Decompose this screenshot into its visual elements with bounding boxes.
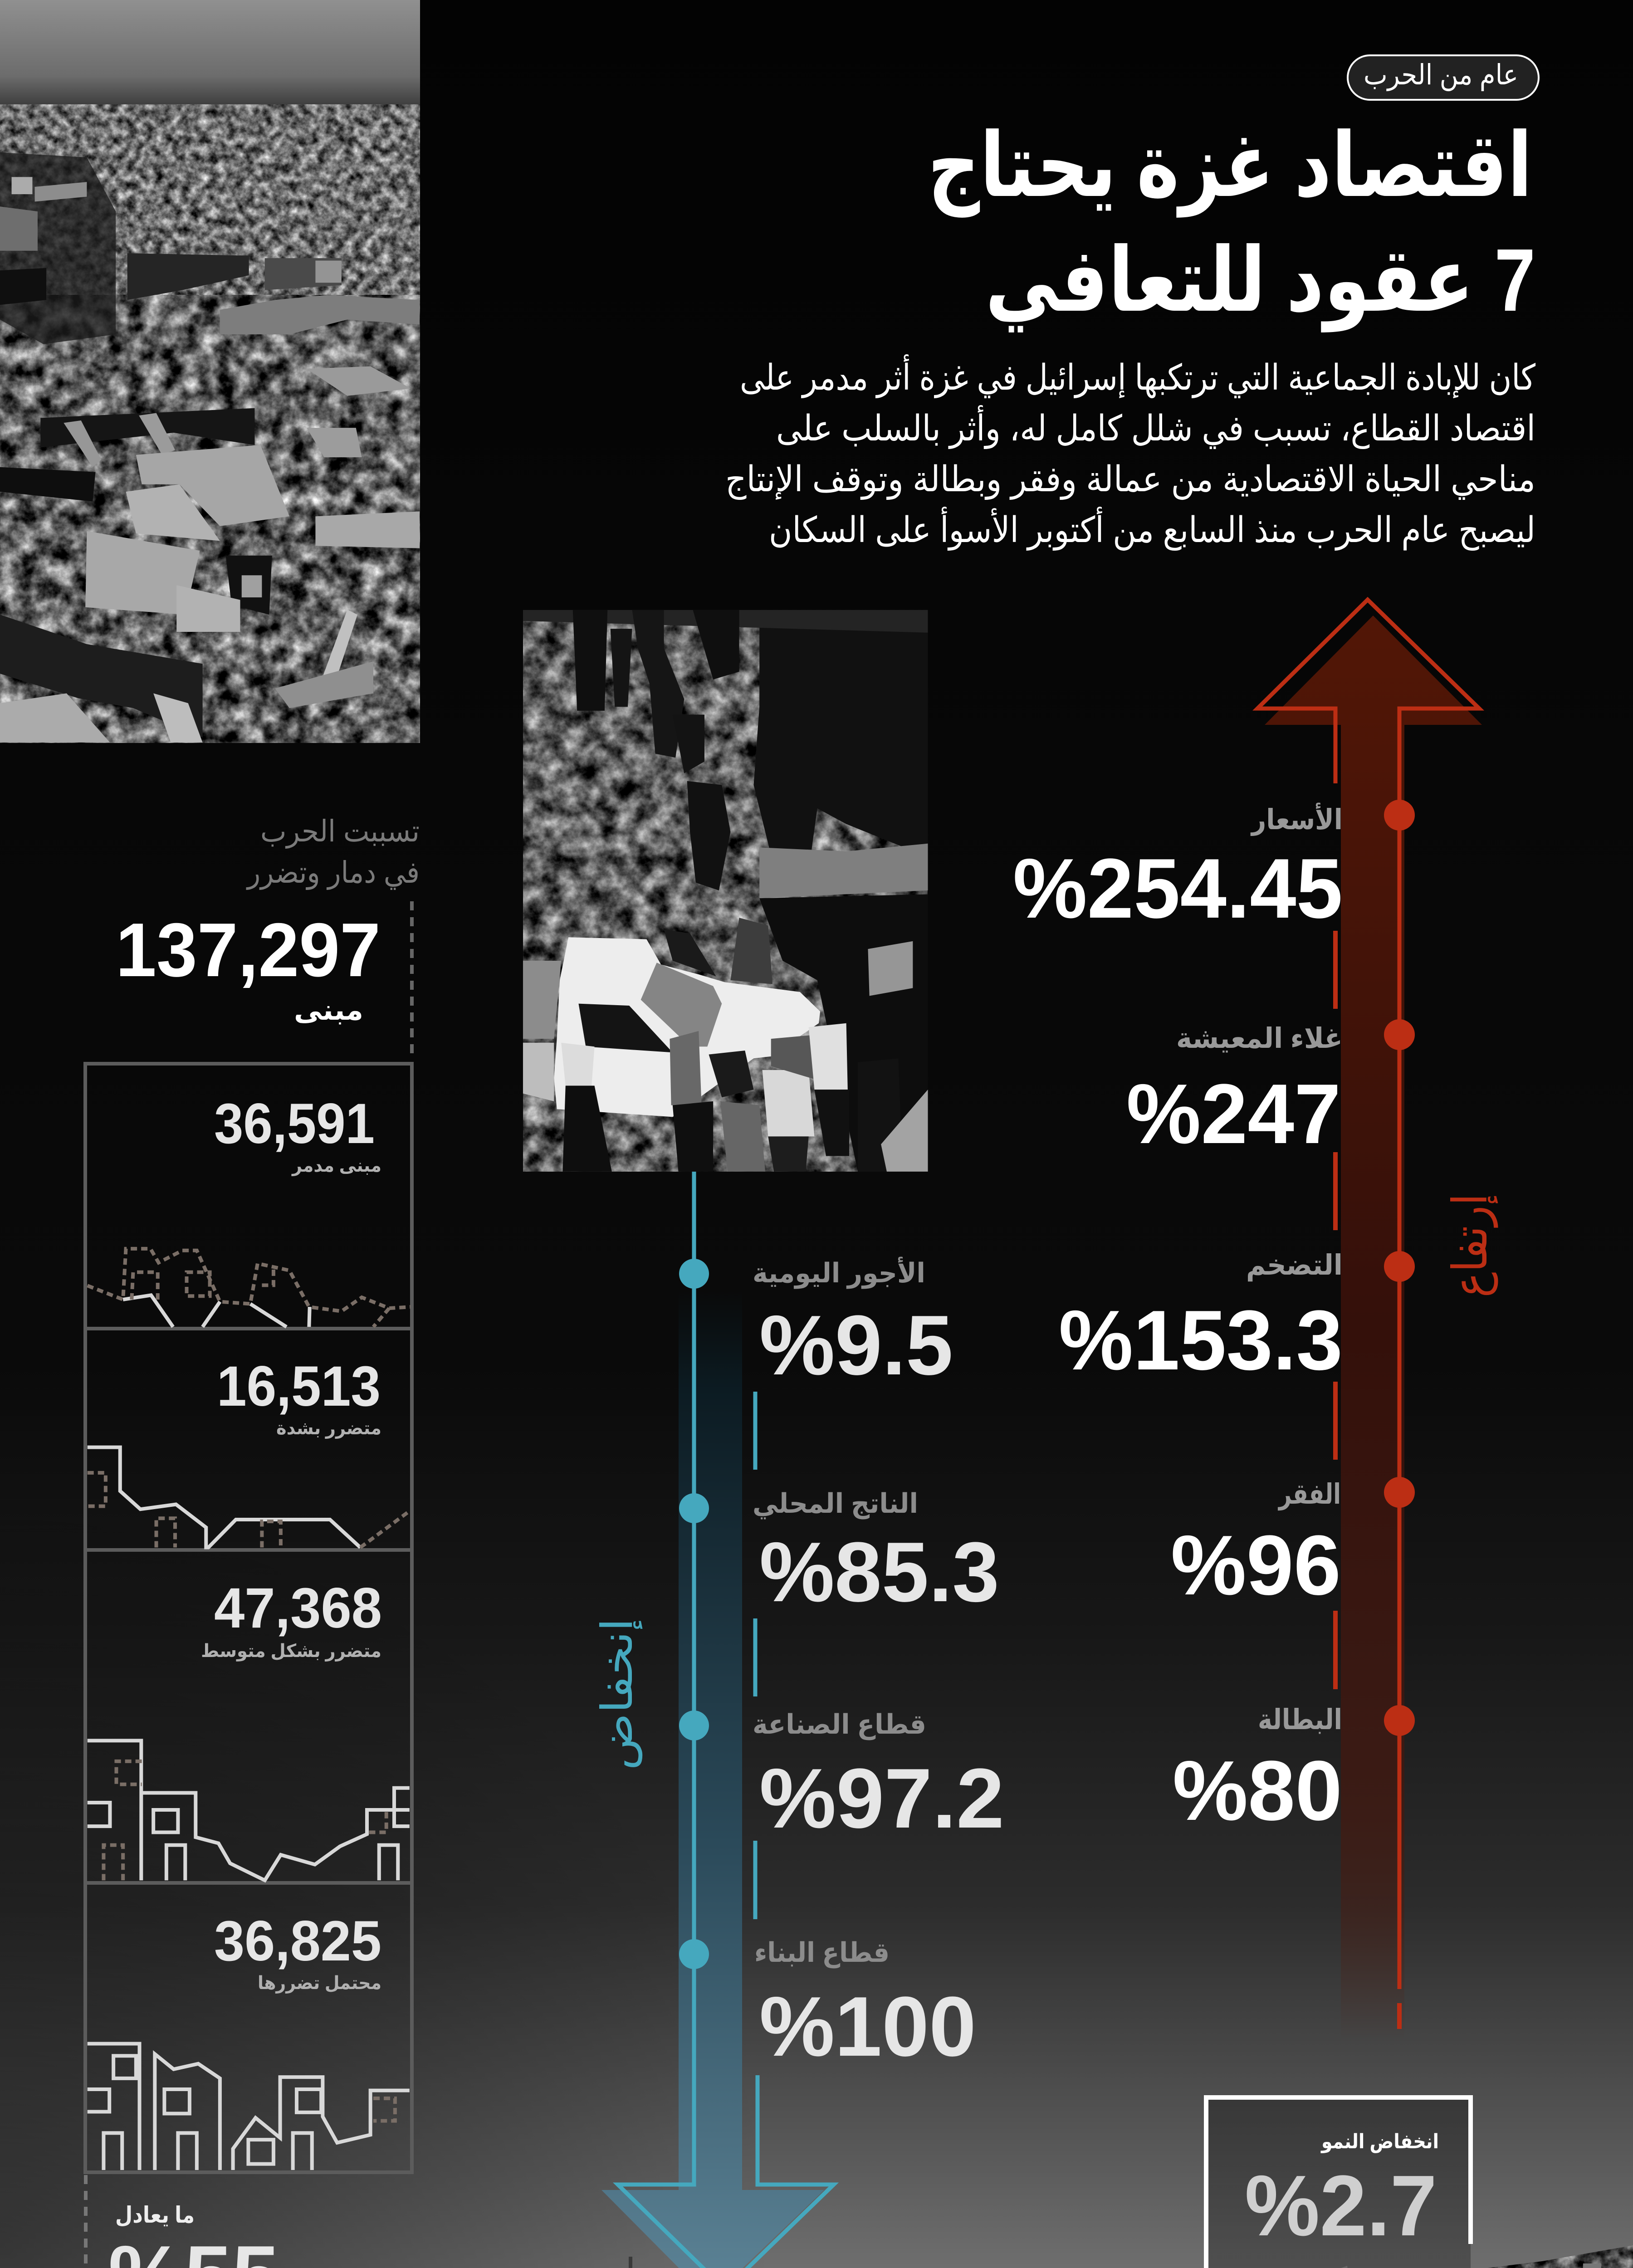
stat: inflation xyxy=(1059,1250,1343,1388)
dashes xyxy=(753,1392,758,1919)
red up arrow xyxy=(1257,600,1482,2041)
stat: prices: الأسعار xyxy=(1250,802,1343,836)
stat: industry sector: قطاع الصناعة xyxy=(753,1709,926,1740)
building damage panel xyxy=(85,1064,412,2172)
category pill: عام من الحرب xyxy=(1364,59,1518,91)
stat: prices: %254.45 xyxy=(1013,841,1343,936)
moderately damaged cell: 47,368 xyxy=(214,1577,382,1640)
category pill xyxy=(1348,55,1539,100)
stat: unemployment: %80 xyxy=(1173,1743,1342,1838)
right ruined building xyxy=(1270,2245,1633,2268)
moderately damaged cell xyxy=(88,1577,410,1880)
possibly damaged cell: 36,825 xyxy=(214,1910,381,1973)
possibly damaged cell: محتمل تضررها xyxy=(258,1973,381,1994)
filled arrow shape xyxy=(601,1290,824,2268)
stat: cost of living xyxy=(1126,1023,1343,1161)
share of Gaza strip xyxy=(71,2175,279,2268)
intro paragraph: كان للإبادة الجماعية التي ترتكبها إسرائيل في غزة أثر مدمر على xyxy=(740,354,1536,399)
title: 7 عقود للتعافي xyxy=(985,230,1535,332)
total buildings figure: مبنى xyxy=(294,995,363,1026)
growth decline box xyxy=(1206,2097,1512,2268)
stat: poverty: %96 xyxy=(1171,1518,1341,1613)
photo: destroyed neighbourhood street (bottom scene) xyxy=(0,2245,1633,2268)
stat: cost of living: غلاء المعيشة xyxy=(1176,1023,1343,1054)
blue down arrow xyxy=(601,1172,834,2268)
photo: crowd around damaged white car xyxy=(523,610,928,1172)
destroyed buildings cell xyxy=(88,1092,411,1327)
stat: industry sector xyxy=(753,1709,1004,1846)
buildings intro text xyxy=(246,814,420,890)
stat: construction sector: %100 xyxy=(759,1979,976,2074)
filled arrow shape xyxy=(1265,616,1482,2041)
moderately damaged cell: متضرر بشكل متوسط xyxy=(201,1641,381,1662)
rebar on roof xyxy=(522,2257,830,2268)
stat: poverty: الفقر xyxy=(1278,1479,1341,1510)
total buildings figure: 137,297 xyxy=(116,907,381,992)
severely damaged cell: 16,513 xyxy=(217,1355,381,1418)
dashes xyxy=(1335,931,1399,2029)
dots xyxy=(1384,800,1415,1736)
buildings intro text: تسببت الحرب xyxy=(260,814,420,849)
rising label: إرتفاع xyxy=(1444,1194,1498,1297)
stat: local product: %85.3 xyxy=(759,1525,999,1619)
arrow outline xyxy=(618,1172,834,2268)
stat: construction sector xyxy=(754,1937,976,2074)
title xyxy=(928,116,1535,332)
growth decline box: %2.7 xyxy=(1245,2158,1437,2254)
possibly damaged cell xyxy=(88,1910,410,2170)
dots xyxy=(679,1259,709,1969)
stat: inflation: التضخم xyxy=(1246,1250,1343,1281)
stat: construction sector: قطاع البناء xyxy=(754,1937,890,1969)
stat: daily wages: الأجور اليومية xyxy=(753,1256,925,1289)
intro paragraph: اقتصاد القطاع، تسبب في شلل كامل له، وأثر بالسلب على xyxy=(776,405,1535,450)
stat: industry sector: %97.2 xyxy=(759,1751,1004,1846)
photo: rubble field with city skyline xyxy=(0,0,420,743)
growth decline box: انخفاض النمو xyxy=(1320,2131,1439,2153)
total buildings figure xyxy=(116,907,381,1026)
intro paragraph xyxy=(725,354,1536,551)
stat: daily wages xyxy=(753,1256,953,1393)
destroyed buildings cell: مبنى مدمر xyxy=(291,1156,381,1176)
stat: inflation: %153.3 xyxy=(1059,1293,1343,1388)
falling label: إنخفاض xyxy=(593,1618,643,1770)
intro paragraph: مناحي الحياة الاقتصادية من عمالة وفقر وبطالة وتوقف الإنتاج xyxy=(725,459,1535,500)
stat: daily wages: %9.5 xyxy=(759,1298,953,1393)
stat: local product: الناتج المحلي xyxy=(753,1488,918,1520)
stat: cost of living: %247 xyxy=(1126,1066,1341,1161)
buildings intro text: في دمار وتضرر xyxy=(246,855,420,890)
stat: unemployment: البطالة xyxy=(1258,1704,1342,1735)
severely damaged cell: متضرر بشدة xyxy=(276,1418,381,1439)
destroyed buildings cell: 36,591 xyxy=(214,1092,375,1155)
intro paragraph: ليصبح عام الحرب منذ السابع من أكتوبر الأسوأ على السكان xyxy=(769,507,1535,551)
severely damaged cell xyxy=(88,1355,410,1548)
share of Gaza strip: ما يعادل xyxy=(115,2202,195,2228)
arrow outline xyxy=(1257,600,1479,1989)
